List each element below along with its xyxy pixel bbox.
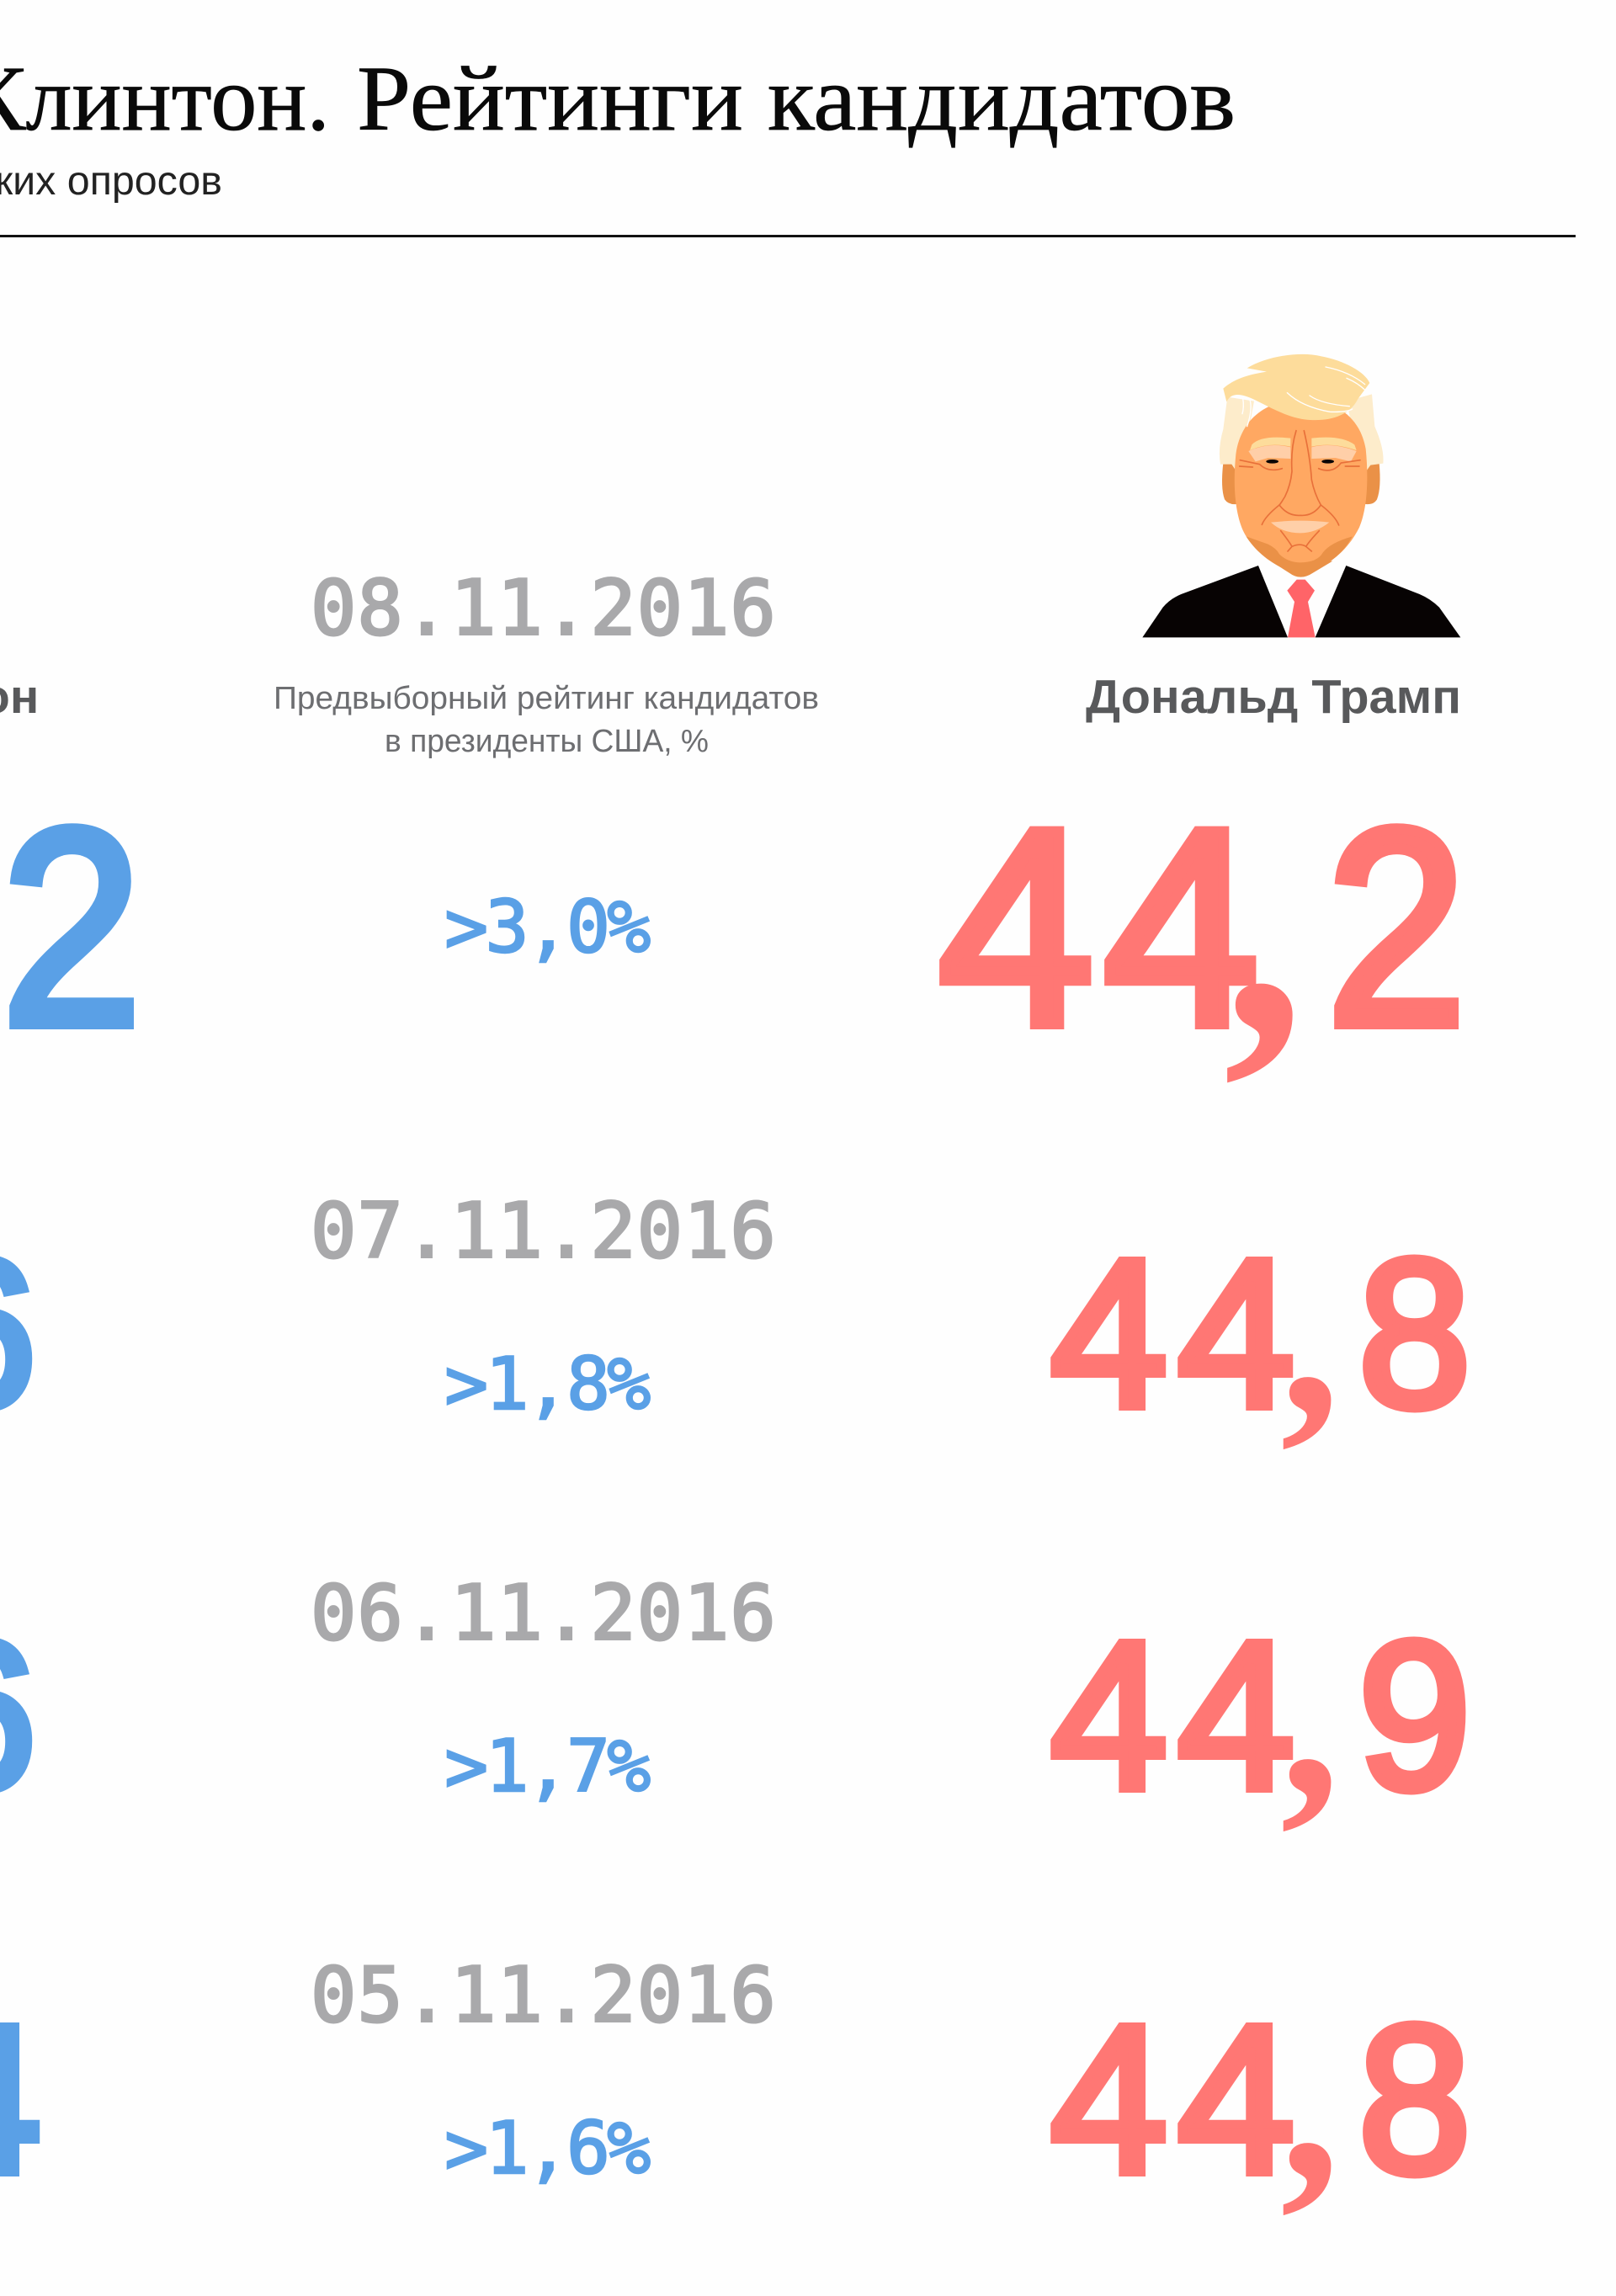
- lead: >1,7%: [444, 1725, 650, 1809]
- date: 07.11.2016: [311, 1187, 777, 1276]
- icon: top hair: [1223, 354, 1369, 420]
- title: [0, 47, 1236, 150]
- Trump value: [1050, 1581, 1470, 1847]
- candidate name: Trump: Дональд Трамп: [1086, 670, 1461, 724]
- icon: jaw shadow: [1247, 536, 1353, 574]
- portrait: Donald Trump: [1142, 354, 1460, 637]
- date: 08.11.2016: [311, 564, 777, 653]
- Trump value: ,: [1280, 1964, 1340, 2230]
- Trump value: [1050, 1198, 1470, 1464]
- Trump value: 44: [938, 771, 1259, 1084]
- icon: mouth: [1271, 521, 1329, 533]
- Trump value: 44: [1050, 1215, 1294, 1451]
- date: 05.11.2016: [311, 1951, 777, 2040]
- icon: eyebrows: [1250, 438, 1357, 450]
- caption: Предвыборный рейтинг кандидатов: [274, 681, 819, 716]
- Trump value: 9: [1358, 1597, 1470, 1833]
- Trump value: ,: [1280, 1581, 1340, 1847]
- Trump value: 2: [1326, 771, 1466, 1083]
- Trump value: ,: [1280, 1198, 1340, 1464]
- lead: >3,0%: [444, 885, 650, 970]
- subtitle: ких опросов: [0, 159, 222, 204]
- lead: >1,6%: [444, 2107, 650, 2191]
- icon: tie: [1287, 580, 1316, 637]
- lead: >1,8%: [444, 1342, 650, 1427]
- icon: ears: [1222, 463, 1380, 577]
- icon: facial lines: [1240, 431, 1360, 551]
- caption: [274, 681, 819, 759]
- icon: face: [1235, 400, 1367, 574]
- icon: jacket: [1142, 566, 1460, 637]
- Trump value: [938, 740, 1466, 1103]
- Clinton value: 2: [2, 771, 141, 1083]
- icon: hair highlights: [1242, 367, 1365, 427]
- row 07.11.2016: [0, 1187, 1470, 1464]
- icon: eyes: [1266, 460, 1334, 464]
- Trump value: 44: [1050, 1981, 1294, 2217]
- caption: в президенты США, %: [385, 724, 709, 759]
- Trump value: 44: [1050, 1597, 1294, 1833]
- Trump value: [1050, 1964, 1470, 2230]
- Trump value: 8: [1358, 1215, 1470, 1451]
- row 05.11.2016: [0, 1951, 1470, 2230]
- row 08.11.2016: [2, 564, 1466, 1103]
- date: 06.11.2016: [311, 1569, 777, 1658]
- Trump value: 8: [1358, 1981, 1470, 2217]
- title: Рейтинги кандидатов: [357, 47, 1236, 150]
- Trump value: ,: [1223, 740, 1305, 1103]
- icon: side hair: [1220, 394, 1384, 477]
- row 06.11.2016: [0, 1569, 1470, 1847]
